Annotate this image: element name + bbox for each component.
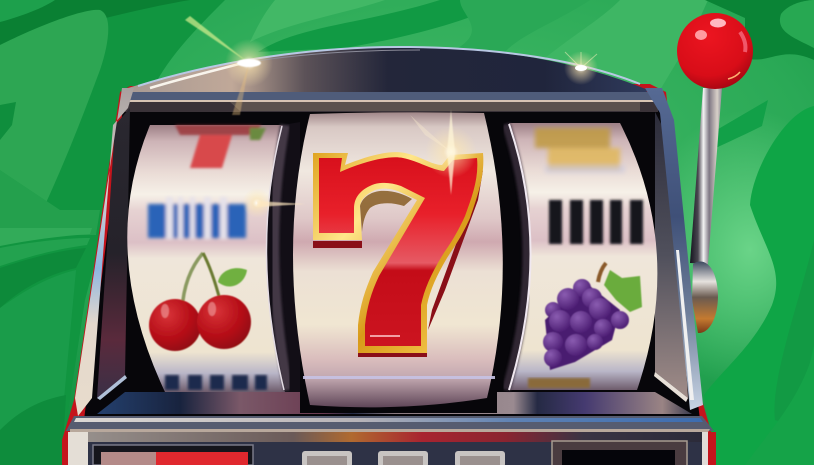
control panel [68,442,714,465]
reel 1 [127,122,300,392]
blurred bottom gold [528,378,590,388]
blurred bottom bars [165,375,267,390]
sparkle: reel 1 [242,188,305,218]
top chrome bar [122,92,662,101]
left dark field [0,0,225,465]
blurred top seven [175,125,266,168]
window dark interior [84,100,700,420]
black bars [549,200,643,244]
reel 2 dark recess [300,112,497,413]
lever rod [690,88,722,264]
dark screen [552,441,687,465]
brown reflection band [68,432,712,442]
blurred blue bars [148,197,246,239]
red outer trim [62,84,716,465]
lever [677,13,753,333]
big red seven [313,152,483,357]
left inner wall [97,108,130,398]
reel 1 rim [267,122,300,392]
grapes [543,263,642,370]
cabinet [62,47,716,465]
sparkle: roof right [564,51,598,85]
header shadow band [125,102,658,112]
lever ball [677,13,753,89]
left chrome pillar [75,88,134,416]
right chrome pillar [645,88,703,410]
sparkle: seven [410,110,477,195]
reel 3 rim [490,120,530,392]
top stripes [258,0,510,52]
seven inner bevel [360,191,412,232]
right inner wall [655,112,688,398]
seven shadow [313,170,483,357]
lower chrome bar [66,416,714,431]
shelf [97,392,692,414]
cherries [149,253,251,351]
red display [93,445,253,465]
reel 2 [293,112,503,413]
seven red fill [319,157,477,346]
sparkle: roof left [185,16,273,115]
blurred top grapes [535,128,625,173]
lever hub [692,262,718,333]
right shapes [700,100,768,155]
seven gold border [313,152,483,353]
roof arch [128,47,648,100]
reel 3 [490,120,657,392]
buttons [302,451,505,465]
